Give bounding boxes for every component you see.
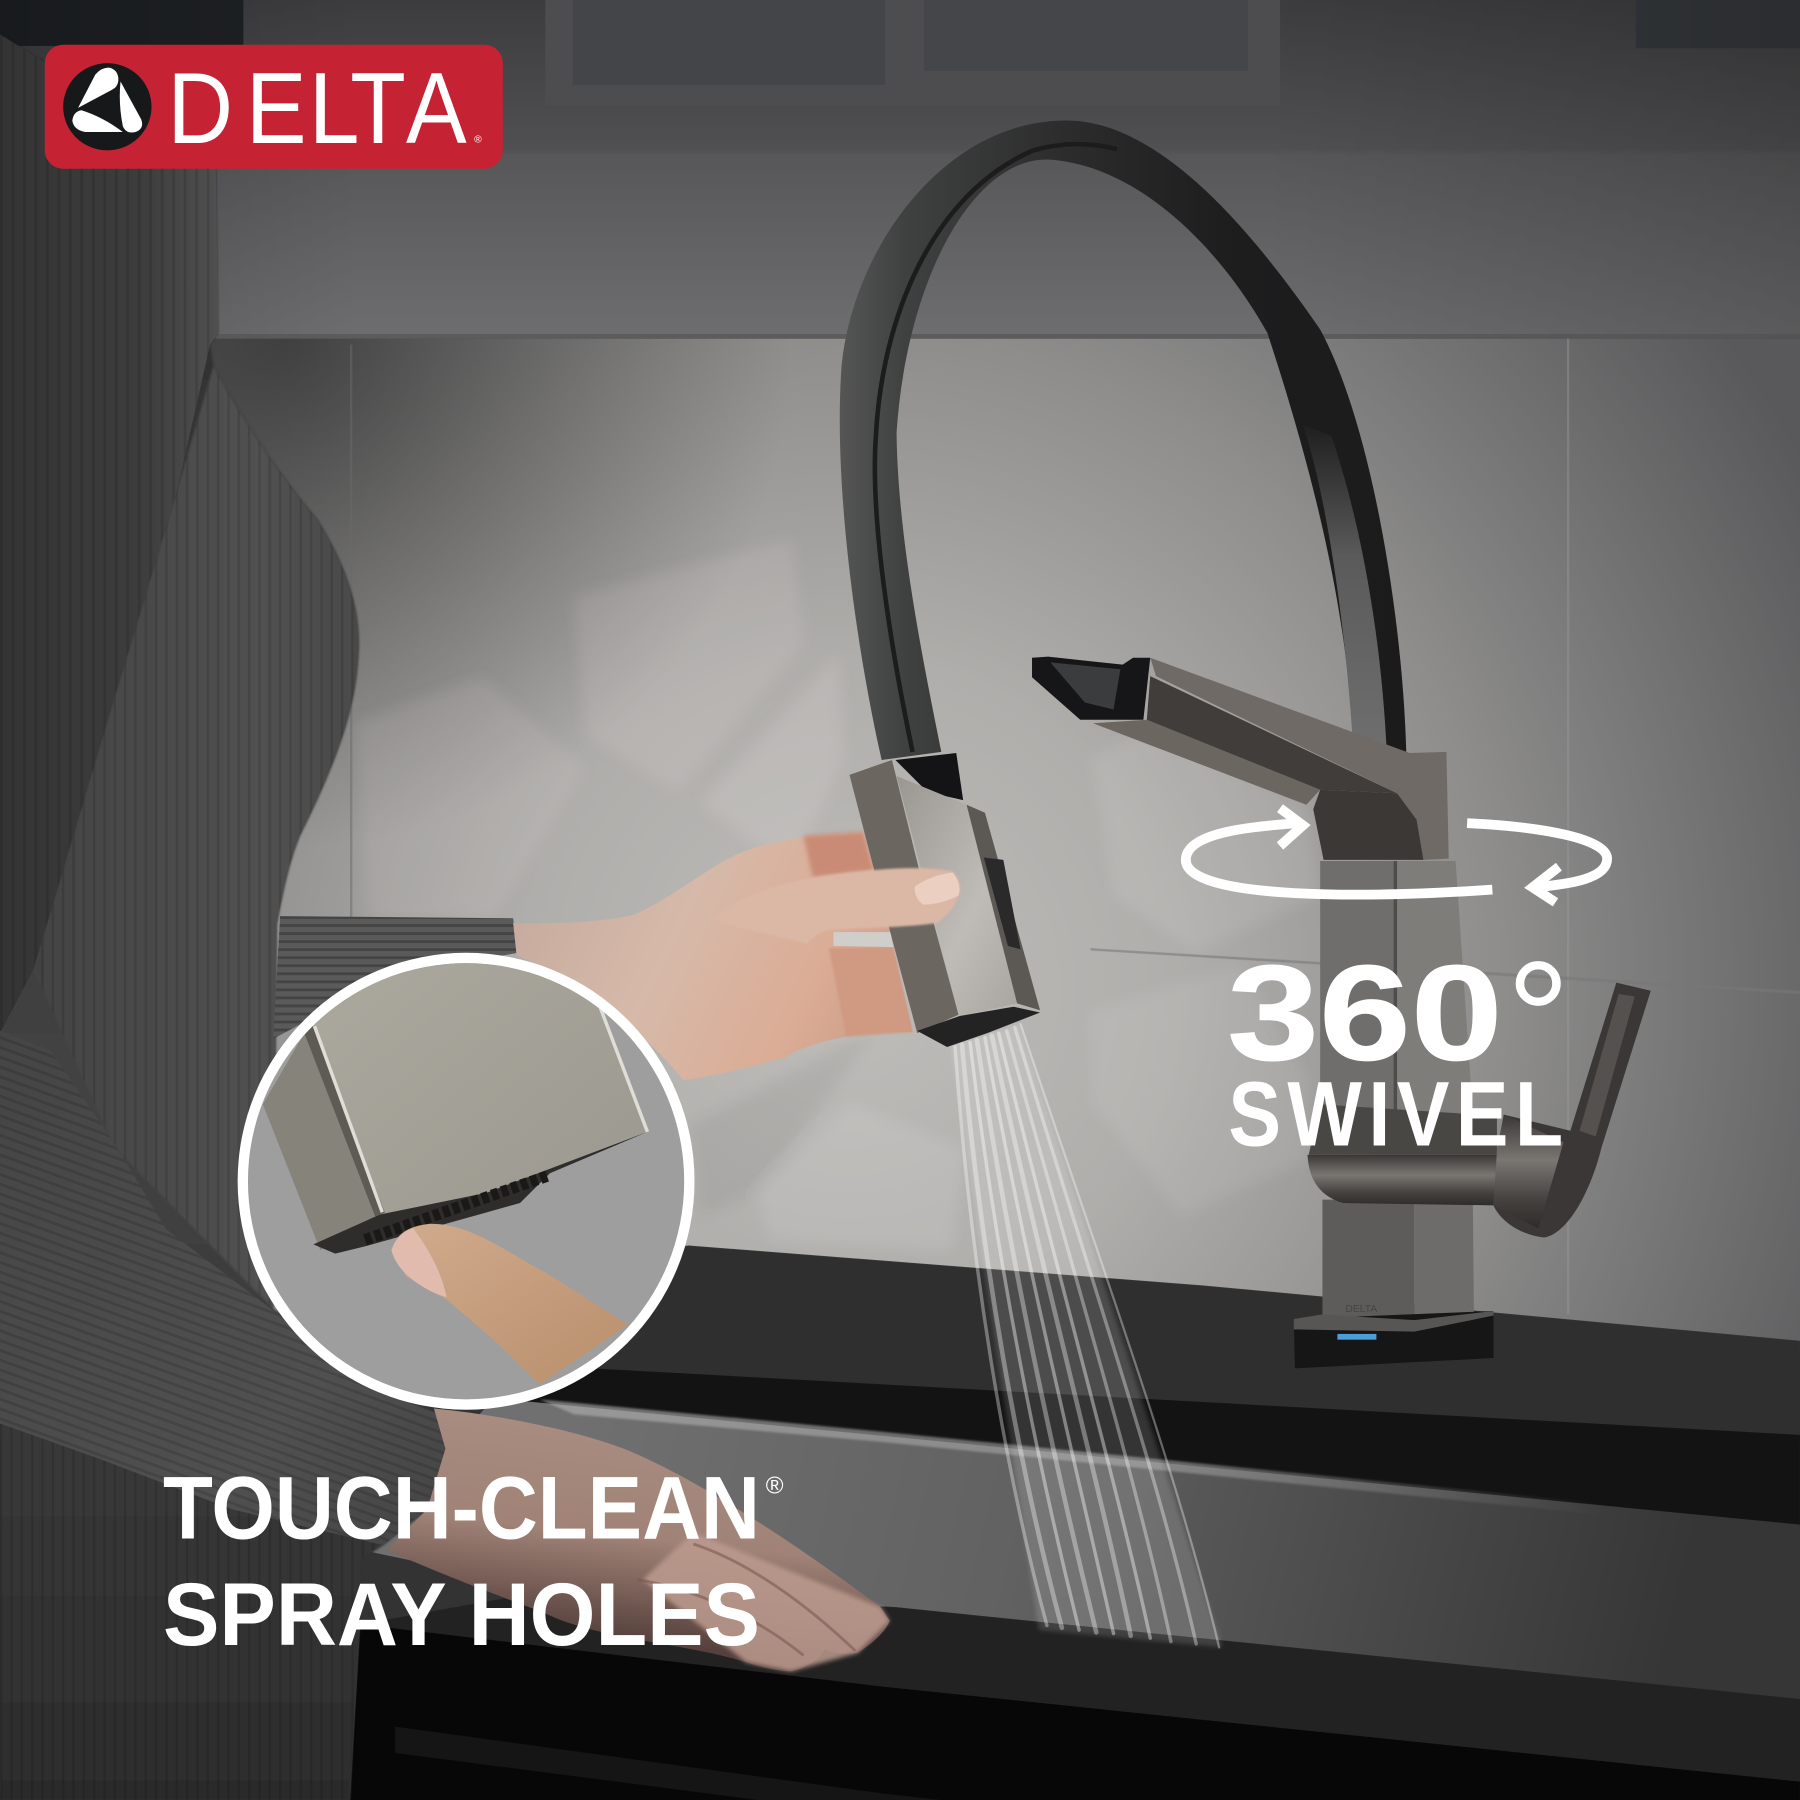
engraved mark: DELTA xyxy=(1345,1304,1377,1315)
swivel arrows xyxy=(1186,808,1607,902)
background: kitchen wall xyxy=(0,0,1800,1349)
lower torso ribs xyxy=(0,1423,383,1800)
callout: 360 degree swivel: ° xyxy=(1506,929,1570,1108)
spout tip xyxy=(1032,657,1150,720)
hand on counter xyxy=(387,1409,890,1671)
spout top face xyxy=(1150,658,1449,860)
fingernail xyxy=(391,1228,447,1297)
metal edges xyxy=(308,1027,380,1215)
sprayer side face xyxy=(263,1027,380,1250)
inset circle: touch-clean spray holes xyxy=(238,941,695,1410)
water spray xyxy=(951,1024,1223,1647)
callout: touch-clean spray holes xyxy=(163,1457,784,1664)
callout: touch-clean spray holes: SPRAY HOLES xyxy=(163,1564,760,1664)
counter and sink xyxy=(350,1246,1800,1800)
finger xyxy=(391,1224,628,1384)
Delta logo xyxy=(45,45,503,169)
handle cylinder xyxy=(1309,1104,1497,1155)
base xyxy=(1294,1311,1493,1368)
callout: touch-clean spray holes: TOUCH-CLEAN xyxy=(163,1457,760,1557)
lower column xyxy=(1322,1200,1414,1320)
logo mark xyxy=(63,63,152,150)
forearm xyxy=(0,1031,445,1545)
woman's sweater xyxy=(0,34,445,1800)
sleeve cuff xyxy=(273,916,518,1039)
callout: touch-clean spray holes: ® xyxy=(766,1472,784,1499)
Delta logo: ® xyxy=(474,134,482,145)
upper arm xyxy=(0,34,218,1033)
chest xyxy=(33,366,359,1309)
logo wordmark: DELTA xyxy=(167,53,467,165)
spout lower face xyxy=(1093,720,1320,805)
upper column xyxy=(1320,861,1396,1148)
spout neck xyxy=(1313,790,1423,860)
spout front face xyxy=(1147,676,1397,793)
sprayer front face xyxy=(315,941,647,1215)
callout: 360 degree swivel: SWIVEL xyxy=(1228,1063,1570,1166)
faucet body xyxy=(1032,657,1651,1368)
spray face with holes xyxy=(313,1132,647,1254)
hand holding sprayer xyxy=(513,832,913,1080)
lever xyxy=(1493,983,1651,1238)
thumb and nail xyxy=(712,868,960,944)
callout: 360 degree swivel xyxy=(1227,929,1570,1166)
callout: 360 degree swivel: 360 xyxy=(1227,937,1503,1089)
faucet hose xyxy=(840,121,1406,760)
pull-down sprayer xyxy=(849,753,1040,1047)
